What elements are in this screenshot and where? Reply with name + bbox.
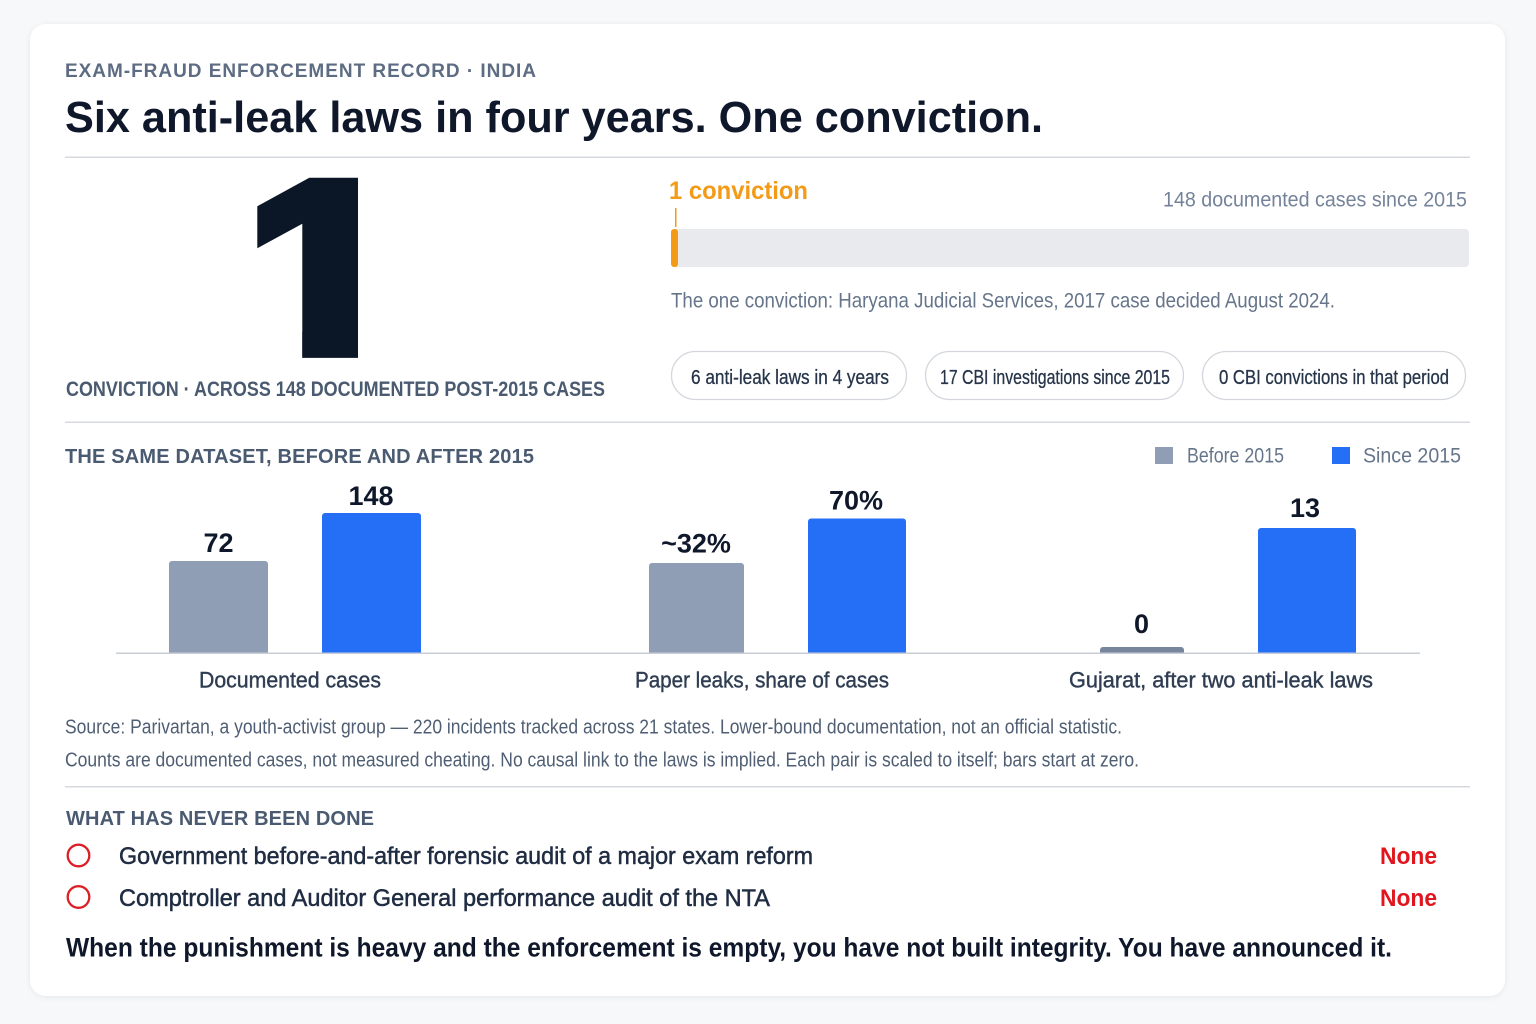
title: Six anti-leak laws in four years. One conviction. <box>65 93 1043 142</box>
pair: gujarat: 13 <box>1290 493 1320 523</box>
bar chart <box>116 481 1420 692</box>
legend: Before 2015 <box>1187 444 1284 468</box>
legend <box>1155 444 1461 468</box>
source note <box>65 716 1139 772</box>
pill: laws: 6 anti-leak laws in 4 years <box>691 367 889 389</box>
row: forensic audit: None <box>1380 843 1437 870</box>
header <box>65 61 1043 142</box>
big number 1: 1 <box>246 124 390 414</box>
conviction note: The one conviction: Haryana Judicial Services, 2017 case decided August 2024. <box>671 290 1335 312</box>
big number caption: CONVICTION · ACROSS 148 DOCUMENTED POST-2015 CASES <box>66 378 605 401</box>
pill: convictions <box>1202 352 1466 400</box>
progress track <box>671 229 1469 267</box>
progress fill <box>671 229 678 267</box>
legend: Since 2015 <box>1363 444 1461 468</box>
row: CAG audit: Comptroller and Auditor General performance audit of the NTA <box>119 885 770 912</box>
pair: gujarat: 0 <box>1134 609 1149 639</box>
row: CAG audit: None <box>1380 885 1437 912</box>
pill: investigations <box>926 352 1184 400</box>
pair: paper leaks <box>635 486 906 692</box>
row: forensic audit: Government before-and-after forensic audit of a major exam reform <box>119 843 813 870</box>
pair: gujarat: Gujarat, after two anti-leak laws <box>1069 668 1373 692</box>
section heading: before and after: THE SAME DATASET, BEFORE AND AFTER 2015 <box>65 446 534 468</box>
pair: paper leaks: ~32% <box>661 528 731 558</box>
pair: paper leaks: 70% <box>829 486 883 516</box>
total label: 148 documented cases since 2015 <box>1163 188 1467 212</box>
stat pills <box>672 352 1466 400</box>
pair: documented cases <box>169 481 421 692</box>
pill: laws <box>672 352 906 400</box>
pair: gujarat <box>1069 493 1373 692</box>
source note: Counts are documented cases, not measured cheating. No causal link to the laws is implied. Each pair is scaled to itself; bars start at zero. <box>65 750 1139 772</box>
pair: documented cases: Documented cases <box>199 668 381 692</box>
pair: paper leaks: Paper leaks, share of cases <box>635 668 889 692</box>
section heading: never done: WHAT HAS NEVER BEEN DONE <box>66 808 374 830</box>
panel: conviction progress bar <box>669 177 1469 312</box>
pair: documented cases: 72 <box>203 528 234 558</box>
closing statement: When the punishment is heavy and the enforcement is empty, you have not built integrity. You have announced it. <box>66 932 1392 962</box>
source note: Source: Parivartan, a youth-activist group — 220 incidents tracked across 21 states. Lower-bound documentation, not an official statistic. <box>65 716 1122 738</box>
panel: big number <box>66 124 605 414</box>
pill: investigations: 17 CBI investigations since 2015 <box>940 367 1170 389</box>
pill: convictions: 0 CBI convictions in that period <box>1219 367 1449 389</box>
conviction label: 1 conviction <box>669 177 808 205</box>
row: forensic audit <box>68 843 1437 870</box>
panel: never been done <box>66 808 1437 912</box>
eyebrow: EXAM-FRAUD ENFORCEMENT RECORD · INDIA <box>65 61 536 82</box>
pair: documented cases: 148 <box>348 481 394 511</box>
row: CAG audit <box>68 885 1437 912</box>
